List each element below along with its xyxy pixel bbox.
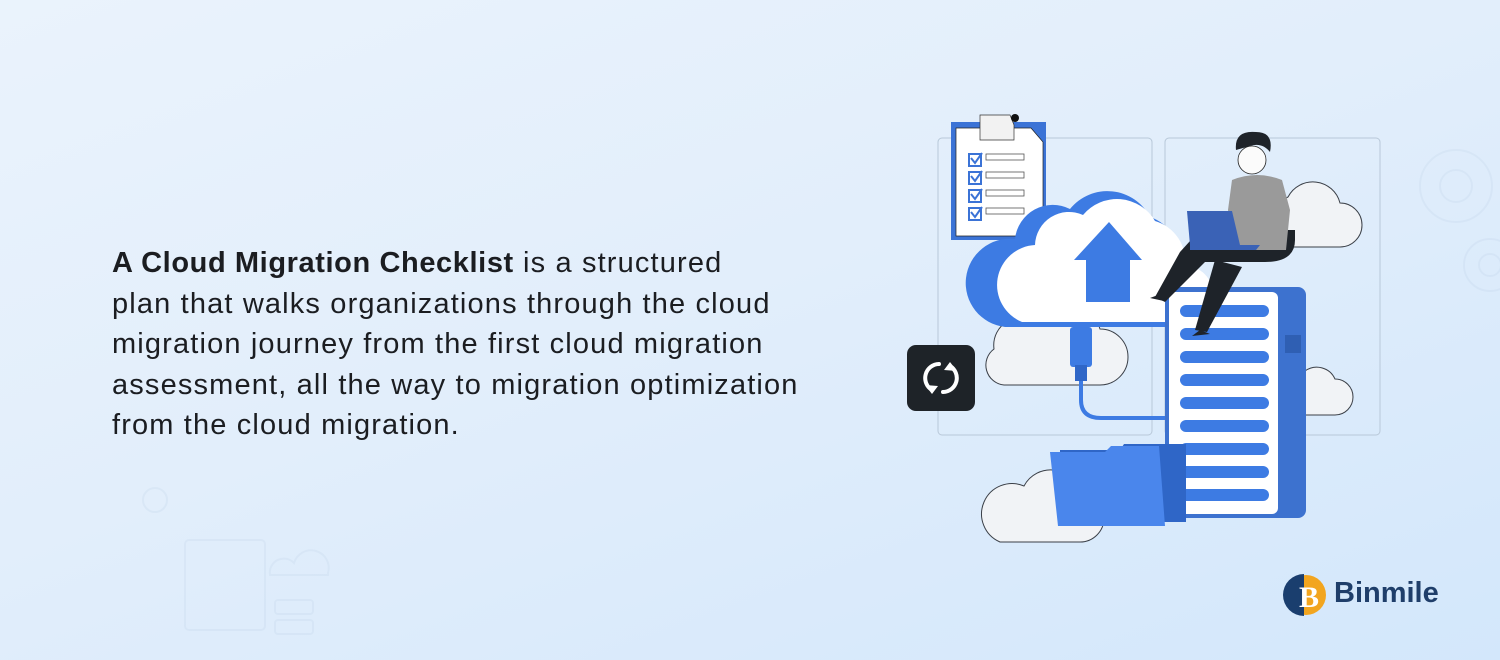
icon: folder [1050,444,1186,526]
panel: right frame [1165,138,1380,435]
text block: definition [112,247,799,441]
text block: definition: assessment, all the way to migration optimization [112,368,799,400]
logo: Binmile [1283,574,1439,616]
text block: definition: from the cloud migration. [112,409,460,441]
icon: background clouds [982,182,1362,542]
icon: cable [1081,380,1171,418]
icon: big upload cloud [966,191,1213,327]
text block: definition: plan that walks organizations through the cloud [112,288,771,320]
text block: definition: migration journey from the first cloud migration [112,328,764,360]
icon: server rack [1165,287,1306,518]
icon: person with laptop [1150,132,1295,336]
panel: left frame [938,138,1152,435]
logo: Binmile: B [1299,581,1319,614]
icon: sync [907,345,975,411]
text block: definition: A Cloud Migration Checklist is a structured [112,247,722,279]
logo: Binmile: Binmile [1334,577,1439,609]
icon: clipboard checklist [951,114,1046,240]
